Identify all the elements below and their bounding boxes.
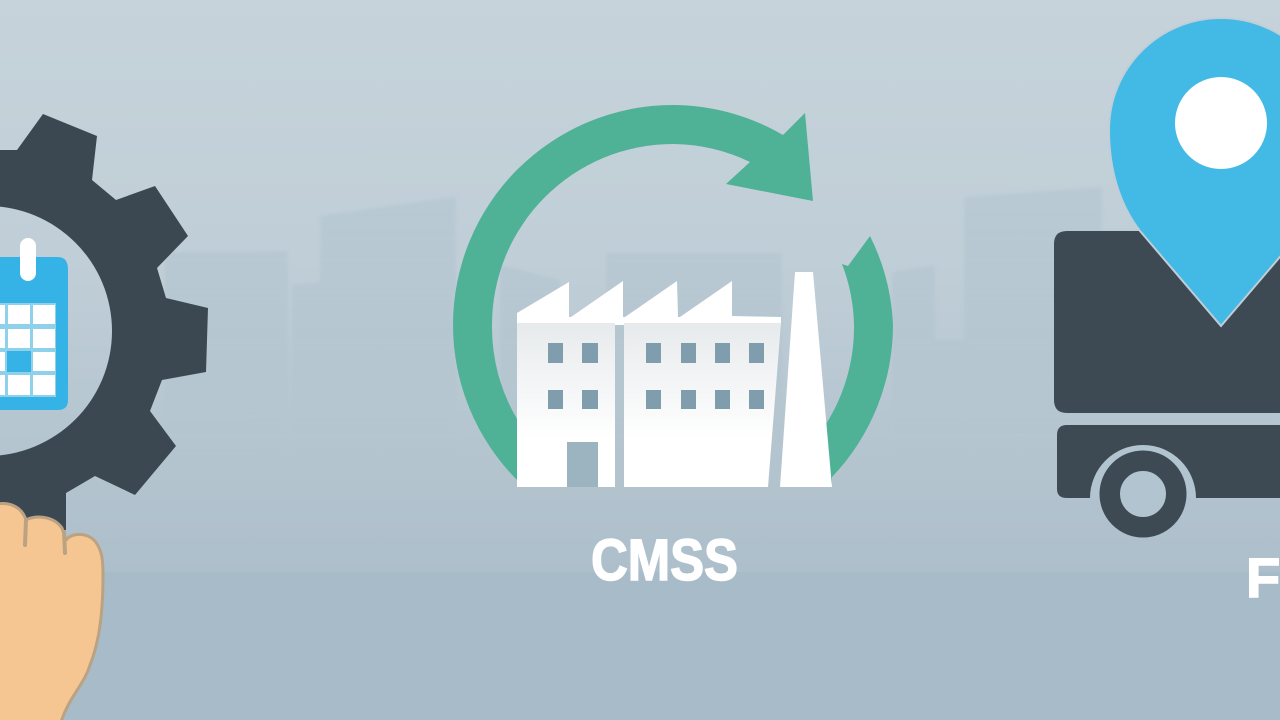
wheel arch [1090, 445, 1196, 498]
label: CMSS: CMSS [591, 528, 738, 593]
ground band [0, 572, 1280, 720]
factory roof [517, 281, 781, 325]
background sky [0, 0, 1280, 572]
door [567, 442, 598, 487]
truck cargo box [1054, 231, 1280, 413]
icon: hand [0, 504, 103, 720]
chimney [780, 272, 832, 487]
factory right wing [624, 323, 781, 487]
icon: truck with location pin [1054, 18, 1280, 527]
windows [548, 343, 764, 409]
icon: calendar [0, 238, 68, 410]
cycle arrow [453, 105, 813, 480]
cycle arrow tail [822, 236, 893, 484]
icon: gear with calendar [0, 114, 208, 530]
factory left wing [517, 323, 615, 487]
gear [0, 114, 208, 530]
city skyline [165, 187, 1280, 470]
finger creases [25, 520, 65, 553]
wheel [1110, 461, 1176, 527]
location pin [1109, 18, 1280, 326]
label: F (cropped): F [1246, 546, 1280, 609]
icon: factory with cycle arrow [453, 105, 893, 487]
truck chassis [1057, 425, 1280, 498]
